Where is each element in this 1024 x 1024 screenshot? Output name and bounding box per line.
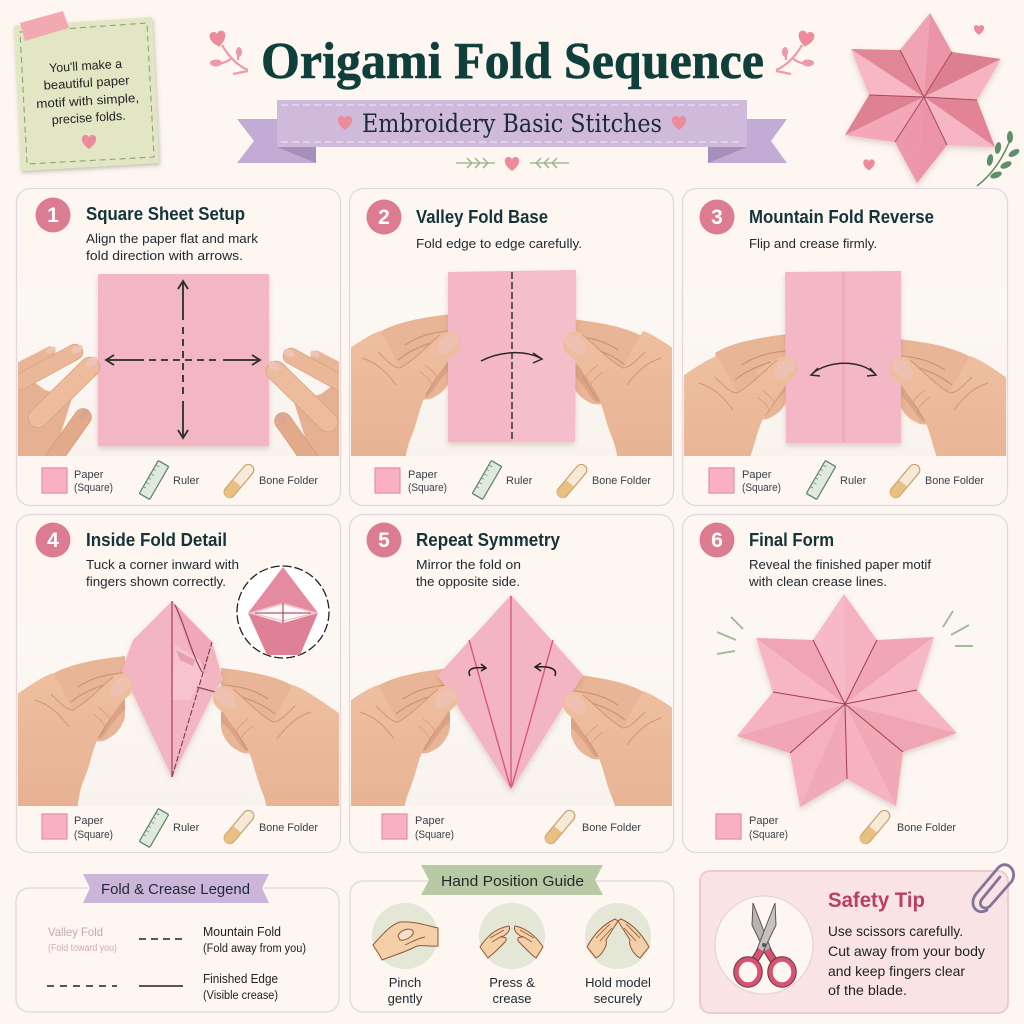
step 5 description: Mirror the fold on (416, 557, 521, 572)
legend: finished edge: (Visible crease) (203, 990, 278, 1002)
materials row step 2 (375, 461, 651, 500)
icon: pinch hand (372, 903, 438, 1006)
icon: paperclip (973, 865, 1014, 912)
legend: mountain fold: Mountain Fold (203, 925, 281, 939)
safety heading: Safety Tip (828, 889, 925, 912)
panel: step 4 (3, 514, 343, 852)
legend banner: Fold & Crease Legend (101, 881, 250, 898)
step 6 description (748, 557, 931, 589)
note card: intro: beautiful paper (43, 73, 130, 93)
materials row step 2: Paper (408, 469, 438, 481)
materials row step 4: Paper (74, 815, 104, 827)
panel: step 2 (330, 188, 693, 506)
step 2 description: Fold edge to edge carefully. (416, 236, 582, 251)
step 5 description (416, 557, 521, 589)
materials row step 2: Bone Folder (592, 475, 651, 487)
safety text: Cut away from your body (828, 943, 985, 959)
legend: finished edge (139, 972, 278, 1002)
step 6 description: with clean crease lines. (748, 574, 887, 589)
icon: press hands: crease (492, 991, 532, 1006)
step 4 description: Tuck a corner inward with (86, 557, 239, 572)
materials row step 4: Bone Folder (259, 822, 318, 834)
step 4 description: fingers shown correctly. (86, 574, 226, 589)
step number 1 (36, 198, 70, 232)
step number 3 (700, 200, 734, 234)
guide banner (421, 865, 603, 895)
panel: hand position guide (350, 865, 674, 1012)
note card: intro: motif with simple, (36, 91, 140, 111)
legend: mountain fold (139, 925, 306, 955)
step 1 heading: Square Sheet Setup (86, 204, 245, 224)
materials row step 1: (Square) (74, 482, 113, 494)
materials row step 1: Bone Folder (259, 475, 318, 487)
icon: holding hands: securely (594, 991, 643, 1006)
materials row step 1: Paper (74, 469, 104, 481)
subtitle ribbon (237, 100, 787, 163)
step number 5: 5 (378, 529, 390, 552)
icon: holding hands: Hold model (585, 975, 651, 990)
step 1 description (86, 231, 259, 263)
step 1 description: Align the paper flat and mark (86, 231, 259, 246)
materials row step 5: Bone Folder (582, 822, 641, 834)
legend: valley fold (47, 925, 117, 986)
illustration: square sheet with hands (18, 274, 339, 456)
note card: intro (14, 11, 159, 171)
materials row step 1 (42, 461, 318, 500)
panel: step 5 (348, 514, 674, 853)
panel: step 6 (682, 514, 1008, 852)
step 4 description (86, 557, 239, 589)
step number 1: 1 (47, 204, 59, 227)
materials row step 3: (Square) (742, 482, 781, 494)
materials row step 3 (709, 461, 984, 500)
step 5 description: the opposite side. (416, 574, 520, 589)
step number 3: 3 (711, 206, 723, 229)
materials row step 4: (Square) (74, 829, 113, 841)
materials row step 4 (42, 808, 318, 847)
panel: step 1 (15, 188, 351, 506)
step number 2 (366, 200, 402, 234)
step number 5 (366, 522, 402, 558)
title: Origami Fold Sequence (261, 33, 764, 90)
safety text: of the blade. (828, 982, 907, 998)
divider ornament (456, 157, 569, 171)
illustration: inside fold with hands (18, 601, 339, 806)
legend: finished edge: Finished Edge (203, 972, 278, 986)
legend: valley fold: Valley Fold (48, 925, 103, 939)
step number 6 (700, 522, 734, 558)
materials row step 6: (Square) (749, 829, 788, 841)
step 4 heading: Inside Fold Detail (86, 530, 227, 550)
illustration: valley fold with hands (351, 270, 672, 456)
origami star: corner decoration (845, 13, 1021, 186)
panel: fold and crease legend (16, 874, 339, 1012)
illustration: mountain fold with hands (684, 271, 1006, 456)
step 6 description: Reveal the finished paper motif (749, 557, 931, 572)
safety text: and keep fingers clear (828, 963, 965, 979)
step number 6: 6 (711, 529, 723, 552)
step 3 heading: Mountain Fold Reverse (749, 207, 934, 227)
materials row step 2: (Square) (408, 482, 447, 494)
icon: press hands (479, 903, 545, 1006)
icon: press hands: Press & (489, 975, 535, 990)
materials row step 5 (382, 808, 641, 846)
icon: right heart sprig (776, 30, 815, 74)
inset: fold close-up (237, 566, 329, 658)
step number 2: 2 (378, 206, 390, 229)
icon: holding hands (585, 903, 651, 1006)
step number 4: 4 (47, 529, 59, 552)
step 1 description: fold direction with arrows. (86, 248, 243, 263)
step 3 description: Flip and crease firmly. (749, 236, 877, 251)
legend: valley fold: (Fold toward you) (48, 943, 117, 954)
legend: mountain fold: (Fold away from you) (203, 943, 306, 955)
materials row step 5: (Square) (415, 829, 454, 841)
materials row step 5: Paper (415, 815, 445, 827)
safety text: Use scissors carefully. (828, 923, 963, 939)
materials row step 6: Paper (749, 815, 779, 827)
legend banner (83, 874, 269, 903)
icon: pinch hand: gently (388, 991, 423, 1006)
note card: intro: You'll make a (49, 57, 122, 75)
note card: intro: precise folds. (51, 109, 126, 127)
materials row step 2: Ruler (506, 475, 533, 487)
materials row step 1: Ruler (173, 475, 200, 487)
materials row step 3: Ruler (840, 475, 867, 487)
materials row step 3: Bone Folder (925, 475, 984, 487)
subtitle ribbon: Embroidery Basic Stitches (362, 109, 662, 138)
step number 4 (36, 522, 70, 558)
step 2 heading: Valley Fold Base (416, 207, 548, 227)
panel: step 3 (667, 188, 1020, 510)
materials row step 4: Ruler (173, 822, 200, 834)
icon: scissors (715, 896, 813, 994)
guide banner: Hand Position Guide (441, 873, 584, 890)
step 5 heading: Repeat Symmetry (416, 530, 560, 550)
step 6 heading: Final Form (749, 530, 834, 550)
illustration: symmetric kite with hands (351, 595, 672, 806)
materials row step 3: Paper (742, 469, 772, 481)
illustration: finished star (684, 590, 1006, 807)
panel: safety tip (700, 865, 1014, 1013)
safety text (828, 923, 985, 998)
materials row step 6: Bone Folder (897, 822, 956, 834)
materials row step 6 (716, 808, 956, 846)
icon: left heart sprig (209, 30, 248, 74)
icon: pinch hand: Pinch (389, 975, 421, 990)
